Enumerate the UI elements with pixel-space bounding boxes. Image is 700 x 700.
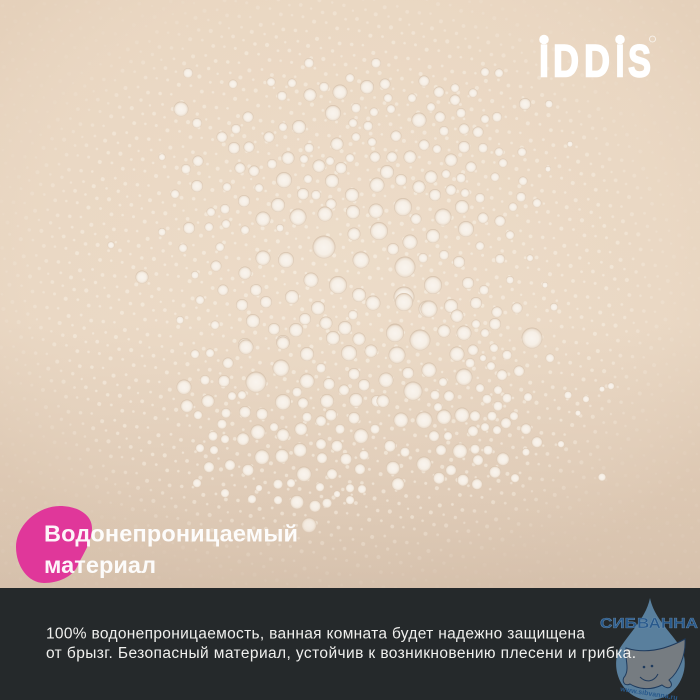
dark footer band [0,588,700,700]
large water droplets [108,58,614,532]
description text: 100% водонепроницаемость, ванная комната будет надежно защищена [46,626,585,642]
IDDIS logo: I [539,36,549,86]
description text [46,626,636,662]
description text: от брызг. Безопасный материал, устойчив к возникновению плесени и грибка. [46,645,636,662]
small water droplets texture [17,0,660,568]
IDDIS logo: S [628,36,651,86]
IDDIS logo: D [584,36,610,86]
heading: Водонепроницаемый [44,520,298,546]
heading: материал [44,552,156,578]
lower fabric shading [0,500,700,588]
pink accent blob [16,506,92,583]
watermark: Sibvanna logo [600,598,699,700]
IDDIS logo: D [553,36,579,86]
watermark: Sibvanna logo: СИБВАННА [600,616,699,632]
IDDIS logo: I [616,36,624,86]
IDDIS logo [539,36,656,86]
heading [44,520,298,578]
